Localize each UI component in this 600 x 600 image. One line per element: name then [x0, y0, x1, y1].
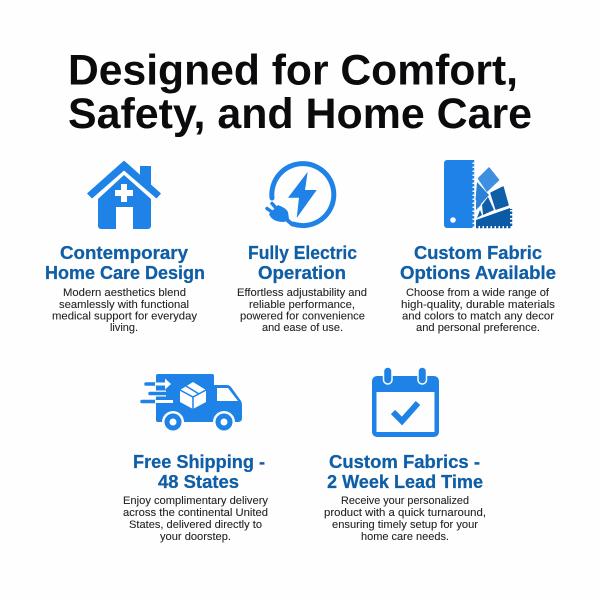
icon: house with medical cross [88, 162, 160, 229]
panel: contemporary home care design [45, 162, 205, 334]
icon: lightning bolt with plug [267, 164, 334, 226]
text block [324, 495, 486, 543]
heading: 48 States [158, 472, 239, 492]
heading: Free Shipping - [133, 452, 265, 472]
text block: seamlessly with functional [59, 299, 189, 311]
panel: custom fabric options available [400, 160, 556, 334]
heading: Home Care Design [45, 263, 205, 283]
text block [123, 495, 268, 543]
heading: Operation [258, 263, 346, 283]
text block: powered for convenience [240, 310, 365, 322]
text block: and ease of use. [262, 322, 343, 334]
heading [400, 243, 556, 283]
text block: across the continental United [123, 507, 268, 519]
text block: Choose from a wide range of [406, 287, 550, 299]
heading: Custom Fabric [414, 243, 542, 263]
panel: free shipping [123, 374, 268, 543]
title: Designed for Comfort, [68, 48, 518, 94]
heading: Fully Electric [248, 243, 357, 263]
heading [133, 452, 265, 492]
title: Safety, and Home Care [68, 91, 532, 138]
text block: Modern aesthetics blend [63, 287, 186, 299]
text block: Enjoy complimentary delivery [123, 495, 268, 507]
icon: calendar with check mark [372, 367, 439, 437]
text block [52, 287, 198, 334]
title [68, 48, 532, 138]
text block: and personal preference. [416, 322, 540, 334]
text block: your doorstep. [160, 531, 231, 543]
icon: delivery truck [142, 374, 242, 433]
text block: home care needs. [361, 531, 449, 543]
heading [248, 243, 357, 283]
panel: custom fabrics lead time [324, 367, 486, 543]
text block: States, delivered directly to [129, 519, 262, 531]
heading: Options Available [400, 263, 556, 283]
text block: and colors to match any decor [402, 310, 554, 322]
heading [45, 243, 205, 283]
heading [327, 452, 483, 492]
text block [401, 287, 556, 334]
text block: living. [110, 322, 138, 334]
text block: reliable performance, [249, 299, 355, 311]
text block: Effortless adjustability and [237, 287, 367, 299]
text block: ensuring timely setup for your [332, 519, 478, 531]
icon: fabric swatch fan [444, 160, 511, 228]
text block: high-quality, durable materials [401, 299, 556, 311]
panel: fully electric operation [237, 164, 367, 334]
heading: Custom Fabrics - [329, 452, 480, 472]
text block: medical support for everyday [52, 310, 198, 322]
heading: 2 Week Lead Time [327, 472, 483, 492]
text block: Receive your personalized [341, 495, 469, 507]
heading: Contemporary [60, 243, 188, 263]
text block [237, 287, 367, 334]
text block: product with a quick turnaround, [324, 507, 486, 519]
